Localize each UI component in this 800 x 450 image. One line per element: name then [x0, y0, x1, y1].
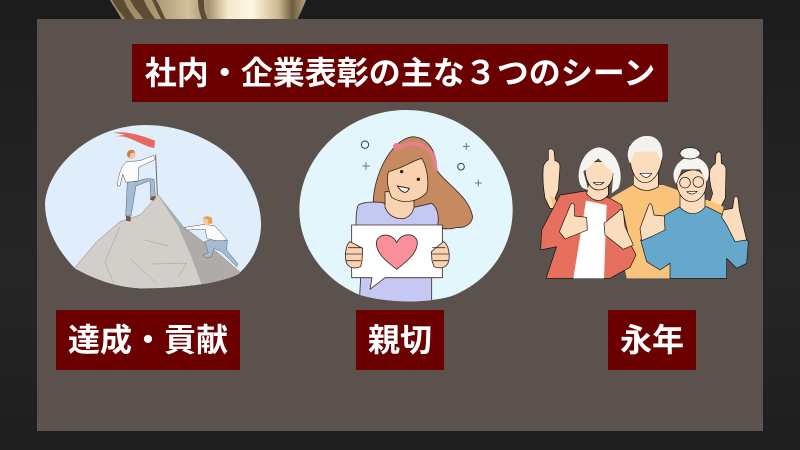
hands	[345, 242, 449, 268]
raised hands	[543, 149, 561, 208]
sparkles	[361, 141, 481, 186]
hair	[373, 137, 473, 229]
label: kindness	[356, 310, 444, 370]
label: long service	[608, 310, 696, 370]
woman blue sweater	[641, 207, 748, 278]
heart	[376, 235, 417, 269]
label: kindness: 親切	[368, 322, 432, 358]
woman red cardigan	[541, 191, 636, 278]
speech card	[352, 225, 442, 289]
torso	[356, 202, 438, 303]
illustration: three seniors with thumbs up	[541, 136, 748, 278]
flag	[113, 132, 157, 195]
neck and face	[385, 192, 414, 219]
title: 社内・企業表彰の主な３つのシーン	[145, 55, 655, 91]
man orange shirt	[550, 185, 727, 278]
illustration: girl holding heart card	[299, 110, 513, 303]
label: achievement and contribution	[56, 310, 240, 370]
label: long service: 永年	[620, 322, 684, 358]
illustration: climbers reaching summit	[45, 125, 261, 293]
woman hands	[559, 203, 587, 239]
title	[132, 44, 668, 102]
label: achievement and contribution: 達成・貢献	[68, 322, 228, 358]
figure: leader	[117, 150, 156, 222]
blue woman hands	[640, 204, 665, 241]
figure: climber	[185, 216, 238, 267]
trophy base	[110, 0, 306, 20]
headband	[397, 144, 436, 170]
